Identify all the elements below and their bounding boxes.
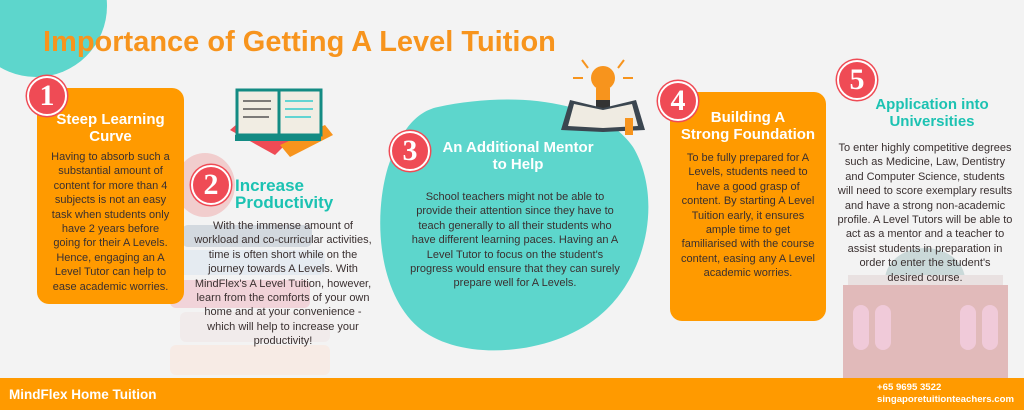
footer contact: +65 9695 3522 [877,382,941,393]
text 1: have 2 years before [62,223,159,235]
text 5 [838,142,1012,284]
text 4: Levels, students need to [688,166,808,178]
panel 4 [670,92,826,321]
text 2: With the immense amount of [213,220,353,232]
number 3: 3 [402,134,418,167]
number 3 [390,131,430,171]
text 4: familiarised with the course [682,238,814,250]
heading 1 [56,111,165,144]
text 3: School teachers might not be able to [426,191,604,203]
heading 1: Steep Learning [56,111,165,128]
heading 4: Strong Foundation [681,126,815,142]
footer contact [877,382,1014,405]
text 5: assist students in preparation in [848,243,1002,255]
text 1: going for their A Levels. [53,237,168,249]
text 1: substantial amount of [58,165,163,177]
text 4 [681,152,815,279]
heading 5 [875,96,989,130]
footer contact: singaporetuitionteachers.com [877,394,1014,405]
panel 3: teal blob [380,100,648,350]
text 4: To be fully prepared for A [687,152,809,164]
decorative teal blob top-left [0,0,107,77]
text 3: provide their attention since they have to [416,205,614,217]
text 5: desired course. [887,272,963,284]
text 3: teach generally to all their students who [418,220,612,232]
text 2: productivity! [254,335,312,347]
text 4: Tuition early, it ensures [692,210,804,222]
text 1: ease academic worries. [53,281,168,293]
text 2: home and at your convenience - [204,306,362,318]
number 1: 1 [40,79,54,112]
text 5: profile. A Level Tutors will be able to [838,214,1012,226]
text 3: progress would ensure that they can surely [410,263,620,275]
text 2: MindFlex's A Level Tuition, however, [195,278,371,290]
heading 2: Increase [235,176,304,195]
footer brand: MindFlex Home Tuition [9,387,156,402]
heading 3: to Help [493,156,543,172]
text 1: Level Tutor can help to [55,266,166,278]
text 5: To enter highly competitive degrees [838,142,1012,154]
number 2 [191,165,231,205]
number 4: 4 [670,84,686,117]
text 3 [410,191,620,289]
heading 1: Curve [89,128,132,144]
text 2: time is often short while on the [209,249,357,261]
text 5: order to enter the student's [859,257,991,269]
number 2: 2 [204,168,218,201]
panel 1 [37,88,184,304]
text 2: workload and co-curricular activities, [194,234,372,246]
text 2: which will help to increase your [207,321,359,333]
heading 5: Universities [889,112,975,130]
text 4: content, easing any A Level [681,253,815,265]
text 5: and have a strong non-academic [845,200,1005,212]
text 1: task when students only [52,209,169,221]
text 1: Having to absorb such a [51,151,170,163]
heading 2 [235,176,334,212]
text 3: have different learning paces. Having an A [412,234,618,246]
text 1: content for more than 4 [54,180,167,192]
heading 2: Productivity [235,193,333,212]
text 4: ample time to get [706,224,790,236]
faint background illustration: apple and books [170,153,330,375]
text 5: will need to score exemplary results [838,185,1012,197]
text 2 [194,220,372,347]
footer [0,378,1024,410]
text 1 [51,151,170,293]
number 5: 5 [850,63,864,96]
text 3: Level Tutor to focus on the student's [427,249,603,261]
number 4 [658,81,698,121]
text 5: and Computer Science, students [845,171,1005,183]
text 3: prepare well for A Levels. [454,277,576,289]
text 5: such as Medicine, Law, Dentistry [845,156,1005,168]
text 4: have a good grasp of [696,181,800,193]
heading 5: Application into [875,96,989,113]
text 4: content. By starting A Level [682,195,814,207]
icon: lightbulb on book [561,59,645,135]
number 5 [837,60,877,100]
faint building illustration [843,248,1008,378]
heading 3 [442,139,594,172]
text 1: subjects is not an easy [55,194,166,206]
text 2: learn from the comforts of your own [196,292,370,304]
text 5: act as a mentor and a teacher to [846,228,1004,240]
heading 4: Building A [711,109,785,126]
text 1: Hence, engaging an A [56,252,165,264]
icon: open book [230,88,333,157]
text 2: journey towards A Levels. With [208,263,358,275]
heading 3: An Additional Mentor [442,139,594,156]
heading 4 [681,109,815,142]
text 4: academic worries. [704,267,792,279]
number 1 [27,76,67,116]
title: Importance of Getting A Level Tuition [43,26,556,58]
